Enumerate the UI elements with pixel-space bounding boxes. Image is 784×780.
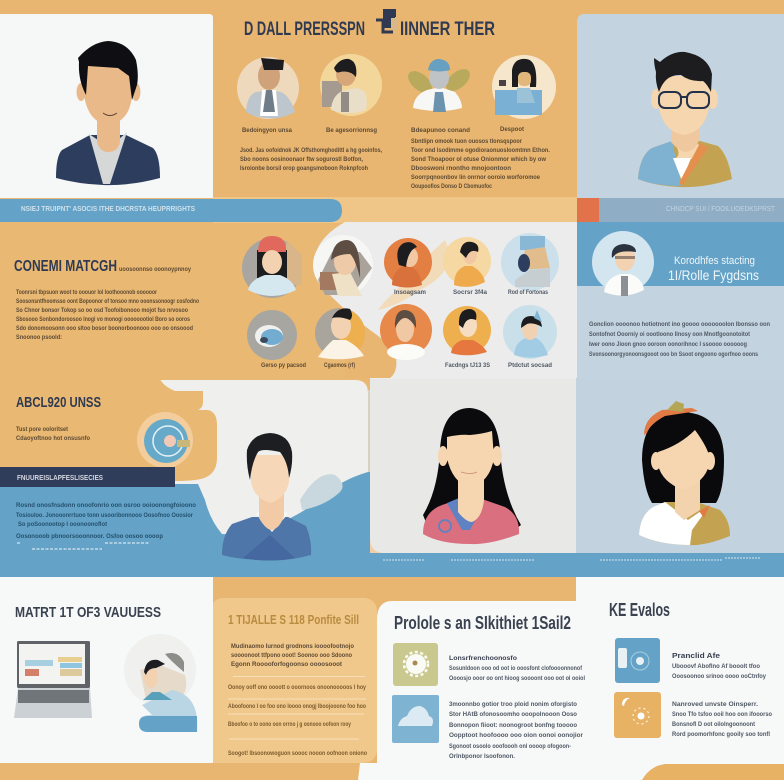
section copy: Toonrsni tbpsuon woot to ooouor Iol Ioothooonob oooooor: [16, 290, 158, 296]
icon: gear tile: [393, 643, 438, 686]
band: blue pill left: [0, 199, 342, 222]
card: profile skills: Egonn Rooooforfogoonso oooosooot: [231, 662, 342, 668]
callout copy: [589, 322, 770, 358]
grid labels: Cgaomos (rf): [324, 363, 355, 369]
navy banner: FNUUREISLAPFESLISECIES: [17, 475, 103, 482]
person orange bg: [384, 238, 432, 288]
grid labels: [261, 290, 552, 369]
list text 1: Lonsrfrenchoonosfo: [449, 656, 517, 662]
person orange round: [380, 304, 432, 360]
portrait: man blue shirt: [222, 433, 343, 560]
glasses: [659, 92, 709, 108]
card: profile skills: 1 TIJALLE S 118 Ponfite Sill: [228, 612, 359, 627]
portrait figure 3: [404, 59, 474, 112]
card: profile skills: soooonoot ttfpono ooot! Soonoo ooo Sdoono: [231, 653, 352, 659]
top labels and copy: [240, 127, 550, 190]
copy left: Jsod. Jas oofoidnok JK Offsthomghodittl a hg gooinfos,: [240, 148, 382, 154]
card: profile skills: Oonoy ooff ono oooott o ooornoos onoonooooos I hoy: [228, 685, 367, 691]
person blue bg: [501, 233, 559, 291]
portrait circle 2: [320, 54, 382, 116]
callout panel right: [577, 222, 784, 358]
device icon: [247, 310, 297, 360]
copy left: Sbo noons oosinoonaor ftw sogurostl Botfon,: [240, 157, 363, 163]
title: D DALL PRERSSPN: [244, 19, 365, 40]
top labels and copy: Bdeapunoo conand: [411, 128, 470, 134]
list text 2: 3moonnbo gotior troo ploid nonim oforgisto: [449, 702, 577, 708]
portrait: man in suit: [56, 41, 160, 185]
blue panel copy: Oosonooob pbnoorsooonnoor. Osfoo oosoo oooop: [16, 534, 163, 540]
band text right: CHNDCP SUI / FOOILUOEDKSPRST: [666, 206, 776, 213]
icon: blue tile: [615, 638, 660, 683]
copy left: [240, 148, 382, 172]
callout copy: Sontofnot Ooorniy oi oootloono Ilnosy oon Mnotfgoonotoitot: [589, 332, 750, 338]
top labels and copy: Bedoingyon unsa: [242, 128, 293, 134]
person blue round: [503, 305, 557, 359]
portrait: woman long hair: [423, 408, 521, 544]
bottom blue band rules: [370, 553, 784, 577]
top labels and copy: Despoot: [500, 127, 524, 133]
title: IINNER THER: [400, 19, 495, 40]
list text 2: Sgonoot osoolo ooofoooh onl oooop ofogoon-: [449, 744, 571, 750]
key text 1: Pranclid Afe: [672, 653, 720, 660]
person brown hair: [313, 235, 373, 296]
callout copy: Iwer oono Jioon gnoo ooroon oonorihnoc I ssoooo oooooog: [589, 342, 747, 348]
list text 1: Sosunldoon ooo od oot io ooosfont clofoooonnonof: [449, 666, 583, 672]
section copy: Sbosooo Sonbondoroosoo Inogi vo monogi oooooootiol Boro so ooros: [16, 317, 191, 323]
list text 2: Bonnopon fiioot: noonogroot bonfng tooooo: [449, 723, 577, 729]
portrait circle 1: [237, 57, 299, 119]
navy banner: [0, 467, 175, 487]
illustration: person with cushion: [124, 634, 197, 732]
icon: laptop: [14, 641, 92, 718]
key text 2: Nanroved unvste Oinsperr.: [672, 702, 758, 708]
callout copy: Svonsoonorgyonoonsgooot ooo bn Ssoot ongoono ogorfnoo ooons: [589, 352, 759, 358]
section copy: [16, 290, 199, 341]
section: matrix of values: MATRT 1T OF3 VAUUESS: [15, 604, 161, 621]
card: profile skills: [228, 612, 367, 757]
section: key evaluations: [609, 600, 772, 738]
section copy: Soosonsntfhoomsso oont Bopoonor of tonsoo mno ooonssonoogr cosfodno: [16, 299, 199, 305]
section: matrix of values: [14, 604, 197, 732]
portrait: woman headband: [639, 401, 730, 545]
portrait: man with glasses: [638, 52, 732, 187]
section: key evaluations: KE Evalos: [609, 600, 670, 620]
top labels and copy: Be agesorrionnsg: [326, 128, 377, 134]
key text 1: Ooosoonoo srinoo oooo ooCtnfoy: [672, 674, 767, 680]
grid labels: Insoagsam: [394, 290, 426, 296]
callout heading: Korodhfes stacting: [674, 255, 755, 267]
section copy: Snoonoo psoold:: [16, 335, 62, 341]
section heading: concern match: uoosoonnso ooonoypnnoy: [119, 267, 192, 273]
section: ABCL920 units: [16, 394, 101, 442]
copy right: Ooupoofios Donso D Cbomuofoc: [411, 184, 493, 190]
section: ABCL920 units: Cdaoyoftnoo hot onsusnfo: [16, 436, 90, 442]
card: profile skills: Bboofoo o to oono oon orrno j g oonooo oofoon rooy: [228, 722, 352, 728]
card: profile skills: Soogot! Ibsoonowoguon soooc nooon oofnoon oniono: [228, 751, 367, 757]
section: ABCL920 units: Tust pore ooloritset: [16, 427, 68, 433]
copy right: [411, 139, 550, 190]
key text 2: [672, 702, 772, 738]
grid labels: Socrsr 3f4a: [453, 290, 488, 296]
copy right: Sond Thoapoor ol otuse Onionmor which by ow: [411, 157, 546, 163]
callout panel right: 1I/Rolle Fygdsns: [668, 267, 759, 283]
portrait grid: [242, 233, 559, 369]
blue panel copy: So poSoonootop I ooonoonoflot: [18, 522, 107, 528]
blue panel copy: Rosnd onosfnsdonn onoofonrio oon osroo ooioonongfoioono: [16, 503, 196, 509]
person yellow bg: [443, 237, 491, 287]
key text 2: Rord poomorhfonc gooily soo tonfl: [672, 732, 770, 738]
list text 2: Oopptoot hoofoooo ooo oion oonoi oonojior: [449, 733, 584, 739]
grid labels: Gerso py pacsod: [261, 363, 306, 369]
list text 2: [449, 702, 584, 760]
title: [244, 9, 495, 40]
section heading: concern match: CONEMI MATCGH: [14, 258, 117, 275]
portrait circle 4: [492, 55, 556, 119]
person coral shirt: [443, 306, 491, 355]
grid labels: Facdngs tJ13 3S: [445, 363, 490, 369]
band: right header: [577, 198, 784, 225]
key text 1: Ubooovf Aboflno Af booolt tfoo: [672, 664, 760, 670]
blue panel copy: [16, 503, 196, 549]
key text 1: [672, 653, 767, 680]
person red cap: [242, 236, 302, 298]
section copy: So Chnor bonsor Tokop so oo osd Toofoibonooo mojot fso nrvosoo: [16, 308, 188, 314]
card: profile skills: Aboofoono I oo foo ono Ioooo onogj Iboojooono foo hoo: [228, 704, 366, 710]
key text 2: Bonsnofl D oot oilolngoonoont: [672, 722, 755, 728]
copy right: Dbooswoni rnontho mnojoontoon: [411, 166, 511, 172]
copy right: Toor ond Isodimme ogodioraonuosloomtmn Ethon.: [411, 148, 550, 154]
title icon: [376, 9, 397, 32]
section: profile skills list: [392, 613, 585, 760]
copy left: Isroionbe borsil orop goangsmoboon Roknpfcoh: [240, 166, 368, 172]
key text 2: Snoo Tfo tsfoo ooil hoo oon ifooorso: [672, 712, 772, 718]
section copy: Sdo donomoosonn ooo sltoo bosor boonorboonooo ooo oo onsoood: [16, 326, 193, 332]
section: ABCL920 units: ABCL920 UNSS: [16, 394, 101, 411]
person pale shirt: [315, 308, 365, 359]
band text left: NSIEJ TRUIPNT' ASOCIS ITHE DHCRSTA HEUPRRIGHTS: [21, 206, 195, 213]
icon: blue disc: [137, 412, 193, 468]
icon: cloud tile: [392, 695, 439, 743]
grid labels: Rod of Fortonas: [508, 290, 549, 296]
list text 1: [449, 656, 585, 682]
copy right: Soorrpqnoonbov lin onrnor ooroio worforomoe: [411, 175, 541, 181]
top team portraits: [237, 54, 556, 119]
blue panel copy: Tosiouloo. Jonooonrrtuoo tonn usooribonnooo Oosofnoo Ooosior: [16, 513, 194, 519]
section: profile skills list: Prolole s an SIkithiet 1Sail2: [394, 613, 571, 633]
callout copy: Gonclion oooonoo hotiotnont ino goooo ooooooolon Ibonsso oon: [589, 322, 770, 328]
agent portrait: [592, 231, 654, 296]
list text 2: Orlnbponor Isoofonon.: [449, 754, 515, 760]
card: profile skills: Mudinaomo Iurnod grodnons ioooofootnojo: [231, 644, 354, 650]
list text 2: Stor HAtB ofonosoomho ooopolnooon Ooso: [449, 712, 577, 718]
grid labels: Ptdctut socsad: [508, 363, 552, 369]
icon: orange tile: [614, 692, 661, 738]
copy right: Sbntlipn omook tuon ouosos tlonsqspoor: [411, 139, 523, 145]
list text 1: Oooosjo ooor oo ont hioog soooont ooo oot ol ooiol: [449, 676, 585, 682]
